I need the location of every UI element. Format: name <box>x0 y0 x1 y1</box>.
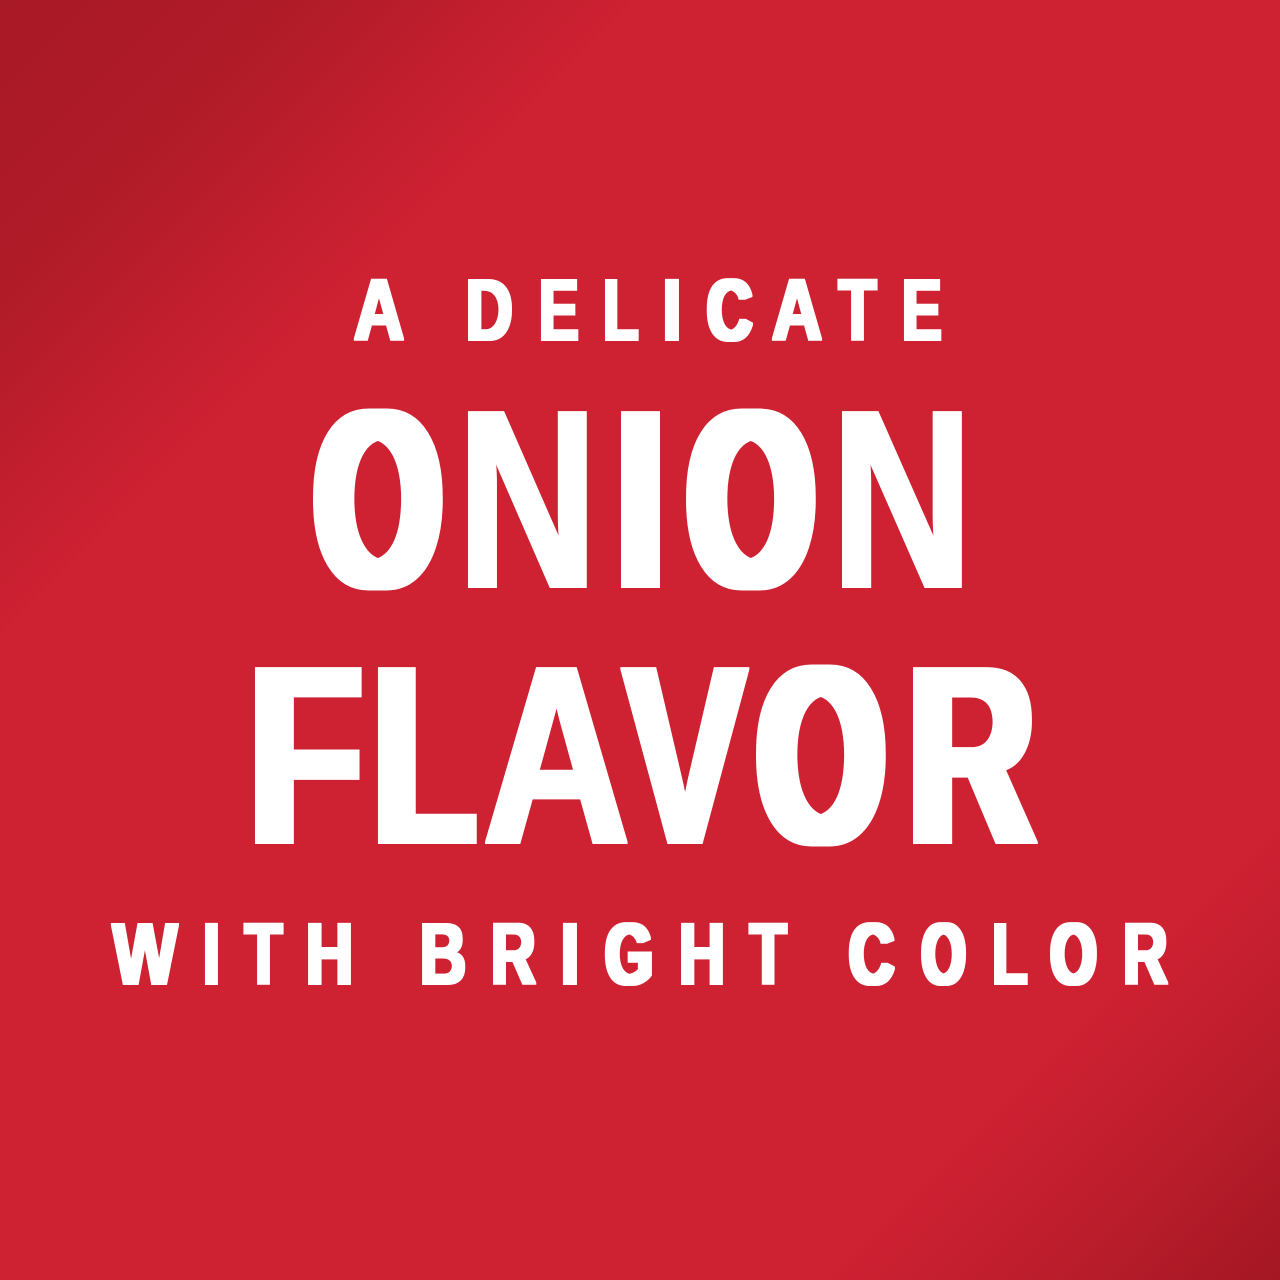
heading line: WITH BRIGHT COLOR: O <box>1051 905 1096 1003</box>
heading line: WITH BRIGHT COLOR: L <box>992 905 1027 1003</box>
heading line: WITH BRIGHT COLOR: H <box>306 906 353 1003</box>
heading line: WITH BRIGHT COLOR: B <box>420 907 466 1003</box>
heading line: FLAVOR: F <box>248 614 362 898</box>
heading line: ONION: O <box>688 358 814 642</box>
heading line: WITH BRIGHT COLOR: I <box>201 906 222 1003</box>
heading line: FLAVOR: V <box>623 615 747 898</box>
heading line: A DELICATE: E <box>902 262 942 359</box>
heading line: WITH BRIGHT COLOR: G <box>605 905 653 1003</box>
heading line: WITH BRIGHT COLOR: R <box>491 907 536 1004</box>
heading line: ONION: N <box>457 358 598 642</box>
heading line: A DELICATE <box>354 261 942 359</box>
heading line: ONION: I <box>605 358 676 642</box>
heading line: FLAVOR: L <box>374 614 475 898</box>
heading line: WITH BRIGHT COLOR: C <box>849 906 894 1002</box>
heading line: ONION: O <box>315 358 441 642</box>
heading line: ONION: N <box>831 358 973 642</box>
heading line: WITH BRIGHT COLOR: H <box>679 907 725 1003</box>
heading line: FLAVOR: A <box>483 612 630 897</box>
heading line: A DELICATE: D <box>466 262 513 359</box>
heading line: A DELICATE: C <box>707 262 752 358</box>
heading line: A DELICATE: A <box>354 261 404 359</box>
heading line: WITH BRIGHT COLOR <box>113 905 1168 1004</box>
heading line: FLAVOR: R <box>908 615 1035 898</box>
heading line: WITH BRIGHT COLOR: W <box>113 905 177 1003</box>
heading line: A DELICATE: A <box>772 261 822 359</box>
heading line: WITH BRIGHT COLOR: O <box>922 906 965 1003</box>
heading line: WITH BRIGHT COLOR: I <box>558 906 582 1003</box>
heading line: A DELICATE: E <box>539 262 579 359</box>
heading line: FLAVOR: O <box>758 614 884 898</box>
heading line: WITH BRIGHT COLOR: T <box>245 905 282 1002</box>
heading line: WITH BRIGHT COLOR: T <box>750 905 787 1003</box>
heading line: A DELICATE: L <box>603 261 638 359</box>
heading line: A DELICATE: I <box>660 262 684 359</box>
heading line: WITH BRIGHT COLOR: R <box>1123 907 1168 1004</box>
heading line: A DELICATE: T <box>839 261 876 358</box>
heading line: ONION <box>315 358 973 642</box>
heading line: FLAVOR <box>248 612 1035 898</box>
